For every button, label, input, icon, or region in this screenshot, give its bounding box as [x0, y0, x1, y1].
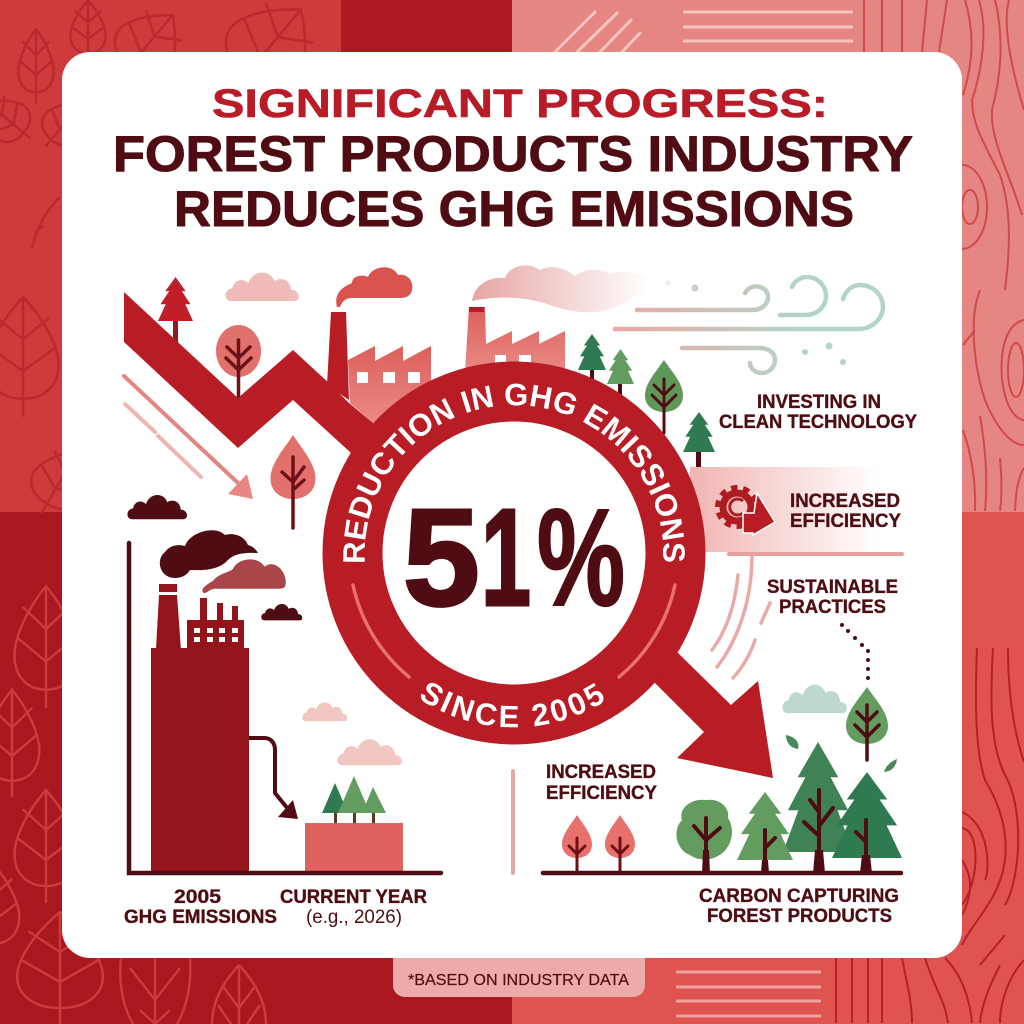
icon: mint cloud	[782, 685, 847, 713]
ring bottom label: SINCE 2005	[420, 682, 604, 728]
factory 2 with fading smoke	[465, 265, 650, 372]
wind swirls	[615, 277, 883, 373]
icon: conifer right	[832, 772, 902, 858]
motion arcs near arrow	[712, 556, 770, 678]
dark smoke cloud	[160, 530, 258, 578]
icon: pink leaf trees	[562, 815, 635, 873]
green trees behind ring	[578, 334, 715, 468]
arrow exit and head	[640, 630, 773, 778]
label: carbon capturing forest products	[699, 886, 899, 927]
factory building	[348, 346, 431, 423]
band underline	[729, 552, 902, 556]
divider post	[511, 771, 515, 873]
ring arc text	[365, 405, 663, 564]
label: increased efficiency lower	[546, 762, 657, 804]
label: sustainable practices	[767, 577, 898, 618]
fading smoke	[472, 265, 650, 312]
factory block	[187, 598, 244, 650]
icon: conifer big	[783, 742, 853, 852]
bar label: 2005	[124, 887, 277, 928]
headline number	[403, 481, 625, 635]
footnote pill: *BASED ON INDUSTRY DATA	[408, 972, 630, 989]
title line 3: REDUCES GHG EMISSIONS	[174, 181, 854, 237]
factory 1 with smoke	[336, 267, 431, 423]
bar label: current year: (e.g., 2026)	[306, 907, 402, 928]
factory windows	[194, 628, 238, 642]
tree trunks	[694, 790, 866, 873]
increased efficiency band	[690, 467, 890, 552]
muted smoke cloud	[201, 558, 287, 594]
bar step-down arrow	[249, 738, 298, 819]
icon: pink cloud	[226, 273, 299, 301]
pink clouds	[302, 702, 347, 721]
headline number: 1	[481, 481, 531, 635]
wind dots	[665, 280, 846, 365]
title	[113, 82, 913, 237]
bar label: 2005: GHG EMISSIONS	[124, 907, 277, 928]
icon: trees on bar	[322, 776, 386, 823]
icon: teardrop tree	[645, 360, 683, 433]
dotted connector	[840, 623, 870, 680]
icon: round tree	[676, 800, 732, 859]
label: carbon capturing forest products: FOREST PRODUCTS	[707, 906, 892, 927]
current year bar	[305, 823, 403, 873]
label: sustainable practices: SUSTAINABLE	[767, 577, 898, 598]
headline number: 5	[403, 481, 480, 635]
bar label: current year	[280, 887, 427, 928]
chart axes	[129, 543, 441, 873]
footer lines	[676, 972, 821, 1016]
lower right forest scene	[513, 685, 902, 873]
icon: round tree	[216, 325, 261, 397]
small dark cloud	[261, 604, 302, 620]
trunk bases	[702, 850, 872, 873]
2005 bar	[151, 648, 249, 873]
label: increased efficiency upper	[790, 491, 901, 532]
ring band	[352, 392, 676, 714]
icon: conifer	[607, 349, 634, 400]
factory building	[465, 307, 565, 372]
ground line	[543, 871, 901, 875]
factory windows	[495, 355, 531, 365]
central ring	[322, 362, 706, 744]
ring accent arcs	[353, 585, 675, 677]
falling leaves	[786, 735, 897, 772]
label: investing in clean technology: CLEAN TECHNOLOGY	[719, 412, 917, 433]
icon: gear with arrow	[718, 488, 775, 535]
label: investing in clean technology: INVESTING IN	[757, 392, 881, 413]
icon: conifer	[683, 412, 715, 468]
icon: green leaf tree	[846, 687, 888, 760]
label: carbon capturing forest products: CARBON CAPTURING	[699, 886, 899, 907]
zigzag stroke	[124, 292, 420, 500]
red smoke cloud	[336, 267, 412, 307]
headline number: %	[537, 481, 625, 635]
factory windows	[357, 372, 420, 383]
chimney on arrow	[327, 312, 349, 400]
icon: conifer mid	[737, 792, 793, 860]
downward zigzag arrow	[124, 292, 773, 778]
icon: red conifer	[158, 277, 193, 342]
tall chimney	[156, 584, 181, 650]
bar label: 2005: 2005	[174, 887, 221, 908]
label: increased efficiency upper: INCREASED	[790, 491, 900, 512]
label: increased efficiency lower: INCREASED	[546, 762, 656, 783]
label: increased efficiency lower: EFFICIENCY	[546, 783, 657, 804]
small dark cloud	[127, 495, 187, 519]
bar chart	[124, 495, 441, 928]
title line 2: FOREST PRODUCTS INDUSTRY	[113, 126, 913, 182]
icon: teardrop tree	[270, 435, 316, 528]
ring top label: REDUCTION IN GHG EMISSIONS	[343, 384, 685, 562]
upper left scene: trees, clouds and thin arrow	[124, 273, 316, 528]
pink cloud	[337, 739, 402, 765]
title line 1: SIGNIFICANT PROGRESS:	[212, 82, 828, 126]
label: increased efficiency upper: EFFICIENCY	[790, 511, 901, 532]
white card	[62, 52, 962, 958]
label: investing in clean technology	[719, 392, 917, 433]
label: sustainable practices: PRACTICES	[779, 597, 886, 618]
chimney cap	[469, 307, 484, 312]
icon: conifer	[578, 334, 606, 385]
footnote pill	[393, 958, 645, 997]
thin diagonal arrow	[124, 376, 253, 499]
bar label: current year: CURRENT YEAR	[280, 887, 427, 908]
